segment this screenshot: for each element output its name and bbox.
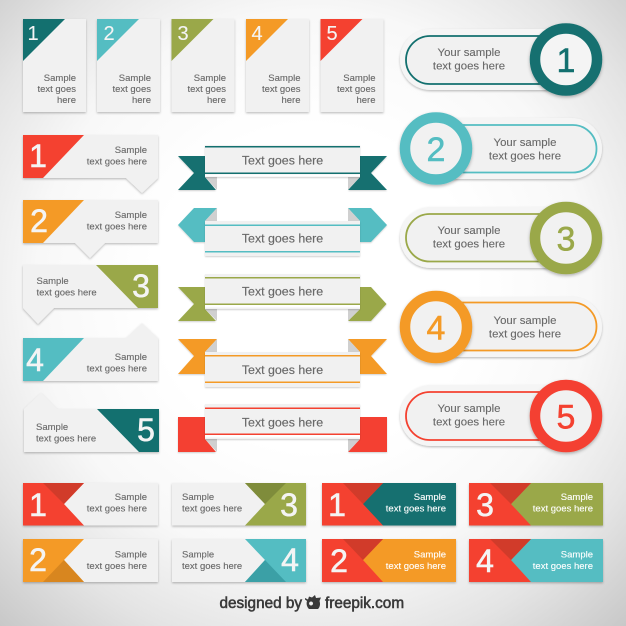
tag 4: Sample bbox=[115, 352, 147, 363]
tag 2 bbox=[23, 200, 158, 258]
card 3 bbox=[172, 19, 234, 112]
pill 3: text goes here bbox=[433, 238, 505, 250]
banner: green 3 red bbox=[469, 483, 603, 526]
banner: red 1: 1 bbox=[29, 487, 47, 523]
card 4: Sample bbox=[268, 73, 300, 84]
tag 5: Sample bbox=[36, 422, 68, 433]
banner: red 1: Sample bbox=[115, 492, 147, 503]
banner: orange 2 bbox=[23, 539, 158, 582]
pill 4: Your sample bbox=[494, 315, 556, 327]
banner: teal 4 red bbox=[469, 539, 603, 582]
banner: orange 2 red bbox=[322, 539, 456, 582]
banner: orange 2: 2 bbox=[29, 542, 47, 578]
banner: green 3: Sample bbox=[182, 492, 214, 503]
panel: coloured banners bbox=[322, 483, 603, 582]
banner: green 3 red: 3 bbox=[476, 487, 494, 523]
card 5 bbox=[320, 19, 384, 112]
tag 2: 2 bbox=[30, 203, 48, 239]
pill 2: 2 bbox=[427, 131, 445, 169]
ribbon 1: Text goes here bbox=[242, 154, 323, 168]
pill 1: Your sample bbox=[438, 47, 500, 59]
pill 5: text goes here bbox=[433, 416, 505, 428]
banner: dark teal 1: 1 bbox=[328, 487, 346, 523]
banner: dark teal 1: Sample bbox=[414, 492, 446, 503]
pill 5: 5 bbox=[557, 398, 575, 436]
banner: orange 2 red: 2 bbox=[330, 543, 348, 579]
pill 1: text goes here bbox=[433, 60, 505, 72]
card 4: here bbox=[281, 95, 300, 106]
banner: green 3 red: text goes here bbox=[533, 504, 593, 514]
tag 3: Sample bbox=[36, 276, 69, 287]
panel: circle pills bbox=[400, 28, 602, 447]
ribbon 4 bbox=[178, 339, 387, 387]
banner: teal 4: Sample bbox=[182, 550, 214, 560]
card 3: here bbox=[207, 95, 226, 106]
ribbon 5 bbox=[178, 404, 387, 452]
card 1: here bbox=[57, 95, 76, 106]
tag 4 bbox=[23, 323, 158, 381]
banner: orange 2 red: text goes here bbox=[386, 561, 446, 572]
tag 1: 1 bbox=[29, 138, 47, 174]
ribbon 2: Text goes here bbox=[242, 232, 323, 246]
banner: teal 4 bbox=[172, 539, 306, 582]
panel: pointer tags bbox=[23, 135, 159, 452]
tag 2: Sample bbox=[115, 210, 147, 221]
card 2: text goes bbox=[112, 84, 151, 95]
icon: freepik logo bbox=[305, 595, 321, 609]
card 4: 4 bbox=[251, 23, 263, 45]
card 1: Sample bbox=[44, 73, 76, 84]
pill 1 bbox=[400, 28, 597, 90]
banner: teal 4: 4 bbox=[281, 542, 299, 578]
banner: teal 4: text goes here bbox=[182, 561, 242, 572]
banner: teal 4 red: text goes here bbox=[533, 561, 593, 572]
card 3: Sample bbox=[194, 73, 226, 84]
pill 1: 1 bbox=[557, 42, 575, 80]
ribbon 5: Text goes here bbox=[242, 416, 323, 430]
banner: teal 4 red: Sample bbox=[561, 550, 593, 560]
banner: green 3 bbox=[172, 483, 306, 526]
card 2: 2 bbox=[103, 23, 115, 45]
tag 1: Sample bbox=[115, 145, 147, 156]
banner: green 3: text goes here bbox=[182, 504, 242, 514]
card 3: text goes bbox=[187, 84, 226, 95]
card 1: text goes bbox=[37, 84, 76, 95]
banner: teal 4 red: 4 bbox=[476, 543, 494, 579]
credit text left: designed by bbox=[220, 595, 302, 612]
pill 3: 3 bbox=[557, 220, 575, 258]
banner: dark teal 1: text goes here bbox=[386, 504, 446, 514]
pill 4: text goes here bbox=[489, 328, 561, 340]
card 5: Sample bbox=[343, 73, 376, 84]
pill 5: Your sample bbox=[438, 403, 500, 415]
pill 2 bbox=[405, 118, 602, 180]
tag 3: 3 bbox=[132, 268, 150, 304]
pill 3 bbox=[400, 207, 597, 269]
banner: orange 2: text goes here bbox=[87, 561, 147, 572]
panel: ribbons bbox=[178, 145, 387, 452]
credit text right: freepik.com bbox=[325, 595, 404, 612]
ribbon 3 bbox=[178, 274, 386, 321]
pill 3: Your sample bbox=[438, 225, 500, 237]
ribbon 4: Text goes here bbox=[242, 363, 323, 377]
banner: orange 2: Sample bbox=[115, 550, 147, 560]
tag 3: text goes here bbox=[36, 288, 97, 298]
tag 3 bbox=[23, 265, 158, 324]
card 1: 1 bbox=[27, 23, 39, 45]
panel: light banners bbox=[23, 483, 306, 582]
card 3: 3 bbox=[177, 23, 189, 45]
card 2 bbox=[97, 19, 160, 112]
pill 2: Your sample bbox=[494, 137, 556, 149]
tag 4: text goes here bbox=[87, 364, 147, 374]
banner: orange 2 red: Sample bbox=[414, 550, 446, 560]
tag 5: text goes here bbox=[36, 434, 96, 444]
ribbon 2 bbox=[178, 208, 387, 256]
footer credit bbox=[220, 595, 404, 612]
pill 5 bbox=[400, 385, 597, 447]
tag 4: 4 bbox=[26, 342, 44, 378]
banner: dark teal 1 bbox=[322, 483, 456, 526]
tag 5: 5 bbox=[137, 412, 155, 448]
tag 1: text goes here bbox=[87, 156, 147, 168]
pill 4: 4 bbox=[427, 310, 445, 348]
card 5: here bbox=[356, 95, 376, 106]
banner: green 3: 3 bbox=[280, 487, 298, 523]
card 4 bbox=[246, 19, 309, 112]
tag 1 bbox=[23, 135, 158, 193]
card 1 bbox=[23, 19, 86, 112]
card 4: text goes bbox=[262, 84, 301, 95]
card 5: 5 bbox=[326, 23, 338, 45]
banner: green 3 red: Sample bbox=[561, 492, 593, 503]
pill 4 bbox=[405, 296, 602, 358]
pill 2: text goes here bbox=[489, 150, 561, 162]
tag 5 bbox=[24, 393, 159, 452]
panel: numbered cards bbox=[23, 19, 384, 112]
card 2: Sample bbox=[119, 73, 151, 84]
banner: red 1 bbox=[23, 483, 158, 526]
card 2: here bbox=[132, 95, 151, 106]
card 5: text goes bbox=[337, 84, 376, 95]
banner: red 1: text goes here bbox=[87, 504, 147, 514]
ribbon 3: Text goes here bbox=[242, 284, 323, 298]
ribbon 1 bbox=[178, 145, 387, 190]
tag 2: text goes here bbox=[87, 222, 147, 232]
